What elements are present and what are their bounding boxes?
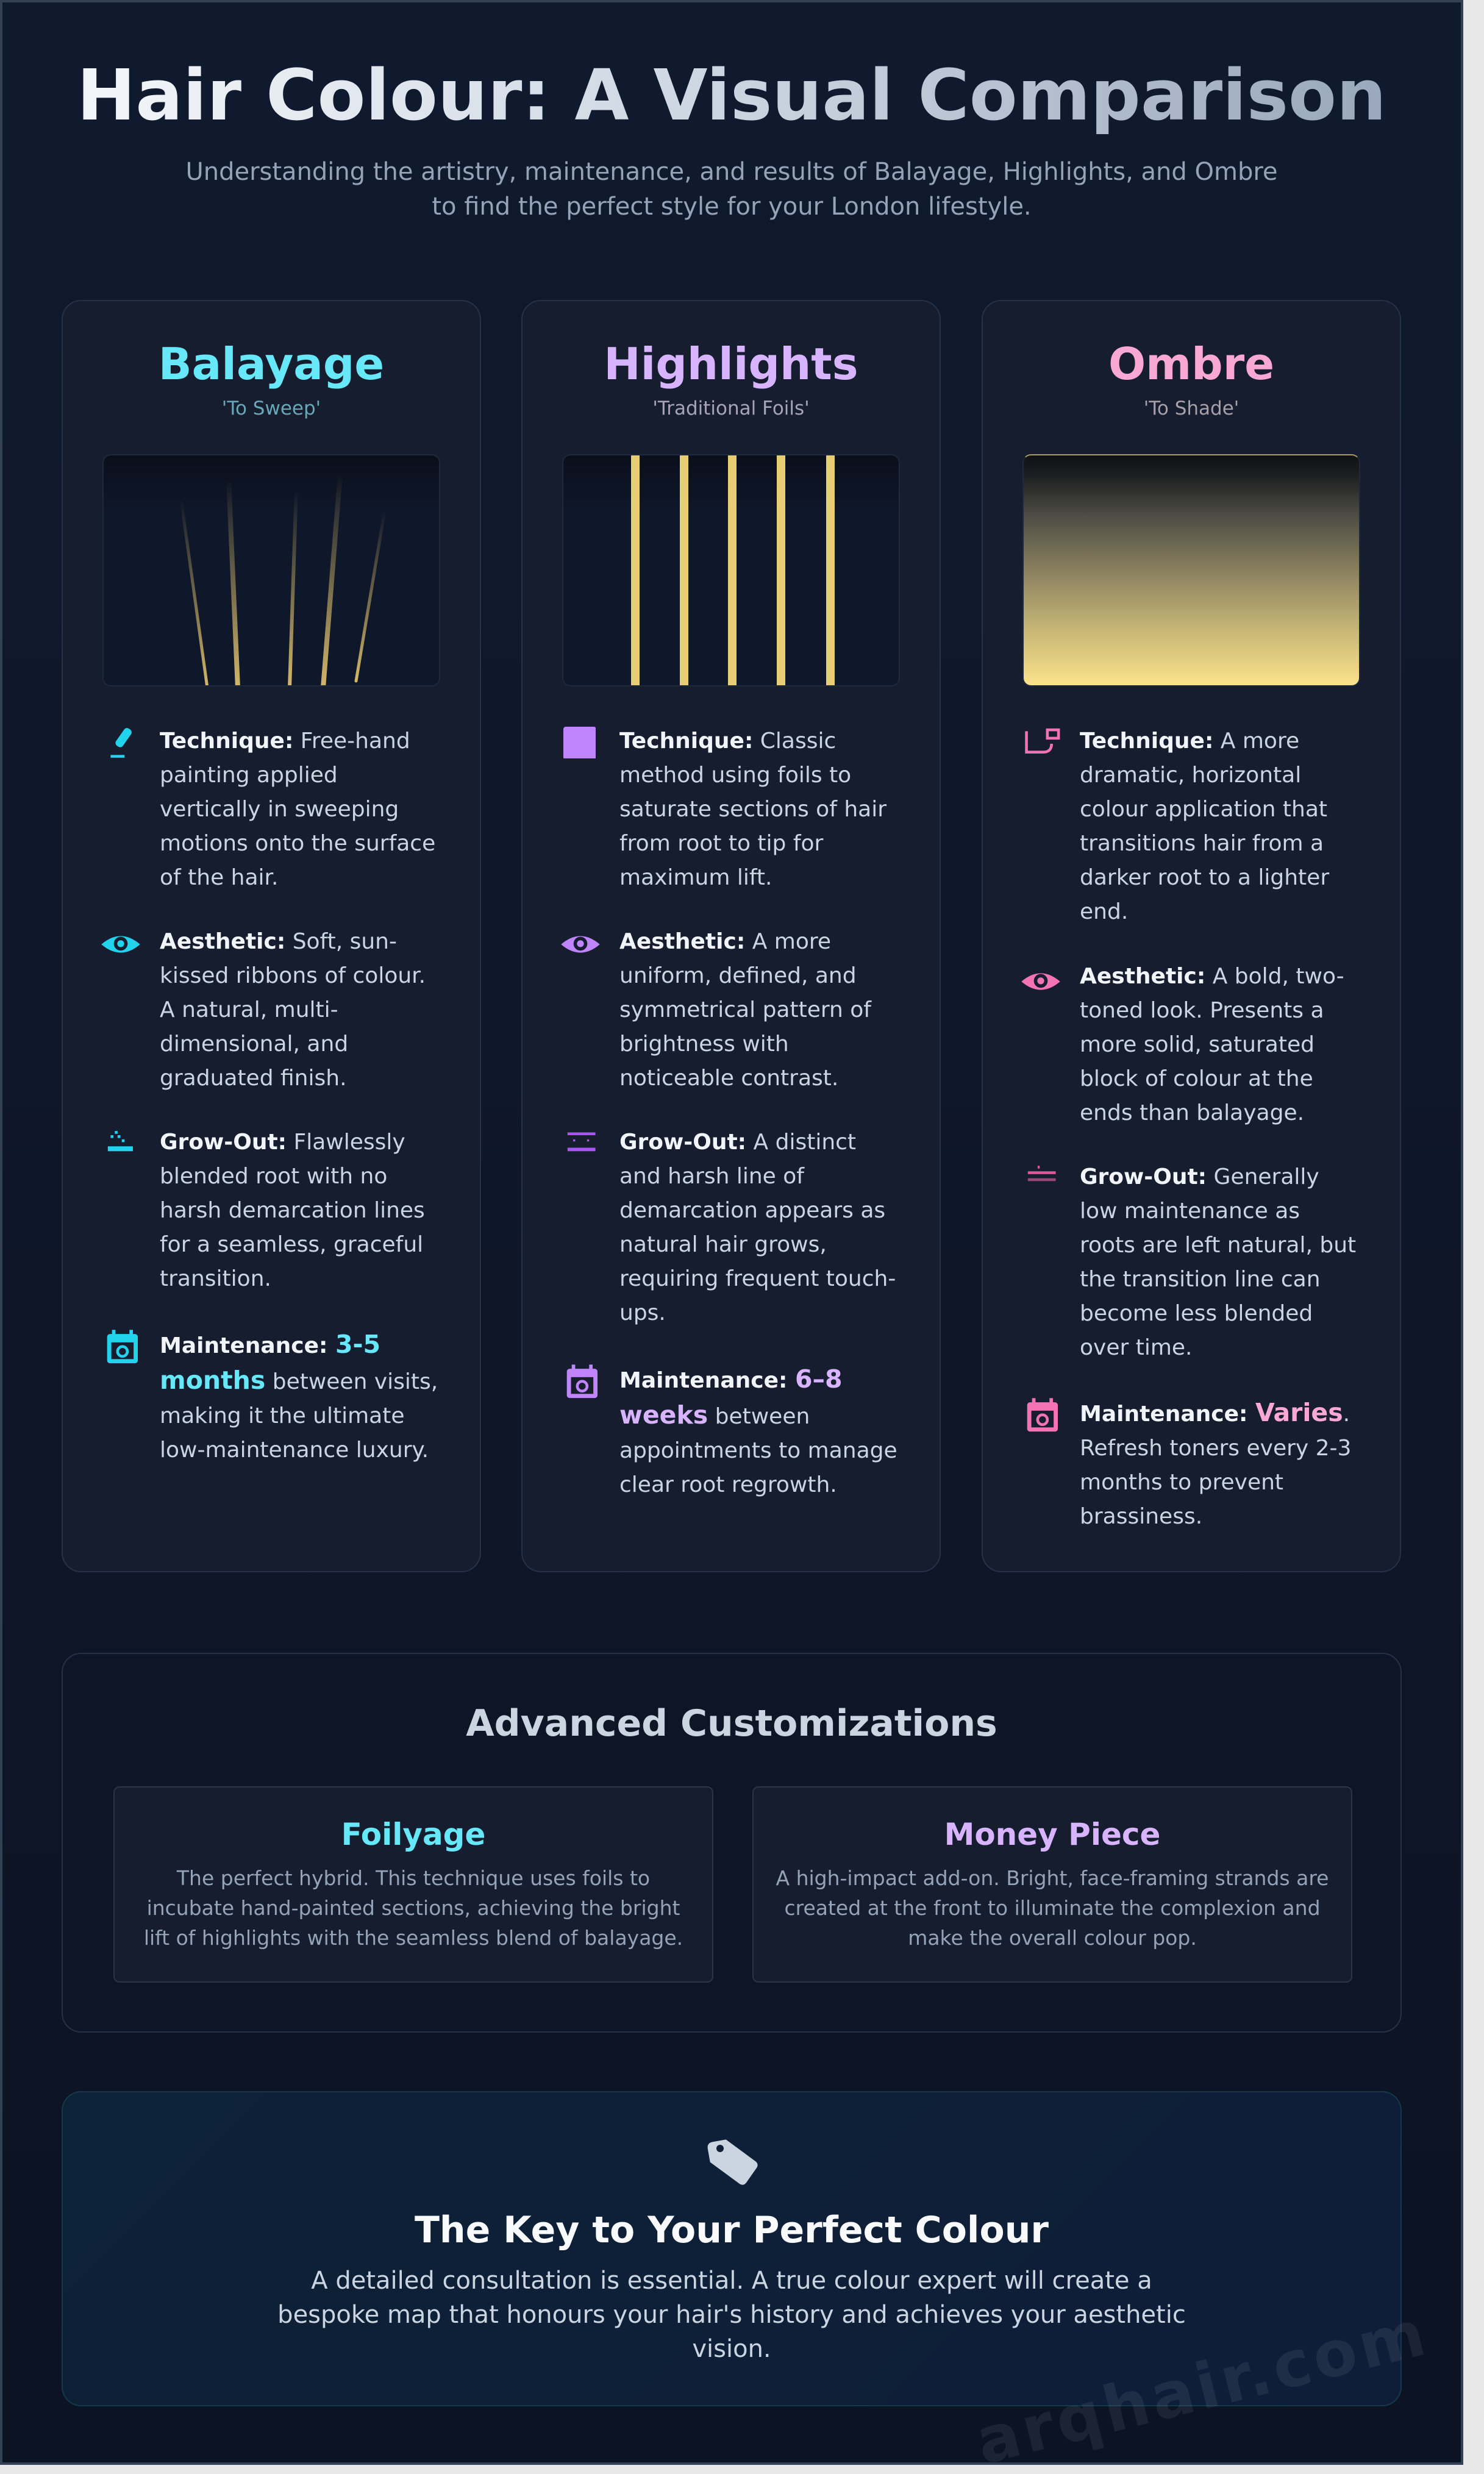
item: maintenance: weeks between <box>619 1400 810 1430</box>
item: maintenance: months to prevent <box>1080 1470 1283 1495</box>
heading: ombre: Ombre <box>1108 338 1274 390</box>
sub-panel: money piece <box>752 1786 1352 1983</box>
item: technique: method using foils to <box>619 763 851 788</box>
item: technique: Technique: Classic <box>619 729 836 754</box>
item: grow-out: roots are left natural, but <box>1080 1233 1356 1258</box>
item: grow-out: for a seamless, graceful <box>160 1232 423 1257</box>
icon: brush <box>110 728 132 758</box>
icon: eye <box>561 936 600 953</box>
subheading: traditional foils: 'Traditional Foils' <box>652 397 810 419</box>
icon: eye <box>101 936 140 953</box>
item: aesthetic: more solid, saturated <box>1080 1032 1315 1057</box>
item: aesthetic: uniform, defined, and <box>619 963 857 988</box>
item: grow-out: natural hair grows, <box>619 1232 827 1257</box>
subtitle <box>185 158 1278 221</box>
item: maintenance: low-maintenance luxury. <box>160 1438 429 1463</box>
panel: advanced customizations <box>62 1653 1402 2033</box>
item: aesthetic <box>101 929 426 1091</box>
sub-panel: money piece: A high-impact add-on. Bright, face-framing strands are <box>776 1866 1329 1890</box>
panel: balayage <box>62 300 481 1572</box>
item: maintenance: Refresh toners every 2-3 <box>1080 1436 1351 1461</box>
item: maintenance: clear root regrowth. <box>619 1472 837 1497</box>
item: technique: transitions hair from a <box>1080 831 1324 856</box>
item: grow-out: the transition line can <box>1080 1267 1321 1292</box>
sub-panel: foilyage: Foilyage <box>341 1817 485 1852</box>
item: aesthetic: toned look. Presents a <box>1080 998 1324 1023</box>
item: technique <box>563 727 886 890</box>
icon: calendar <box>567 1364 598 1399</box>
item: technique: vertically in sweeping <box>160 797 399 822</box>
icon: tag <box>707 2139 758 2185</box>
icon: square <box>563 727 596 758</box>
heading: balayage: Balayage <box>159 338 384 390</box>
item: aesthetic: graduated finish. <box>160 1066 347 1091</box>
text: consultation: A detailed consultation is essential. A true colour expert will create a <box>311 2267 1152 2295</box>
sub-panel: money piece: created at the front to illuminate the complexion and <box>784 1896 1321 1920</box>
item: technique: motions onto the surface <box>160 831 435 856</box>
item: grow-out: requiring frequent touch- <box>619 1266 896 1291</box>
item: grow-out: become less blended <box>1080 1301 1313 1326</box>
illustration: ombre gradient <box>1022 454 1360 686</box>
sub-panel: foilyage <box>113 1786 713 1983</box>
heading: highlights: Highlights <box>604 338 858 390</box>
item: technique <box>1025 728 1329 924</box>
item: maintenance: making it the ultimate <box>160 1403 405 1428</box>
subtitle: to find the perfect style for your London lifestyle. <box>432 193 1032 221</box>
item: aesthetic: ends than balayage. <box>1080 1100 1304 1125</box>
item: aesthetic: block of colour at the <box>1080 1066 1313 1091</box>
icon: harsh line <box>567 1132 596 1151</box>
item: maintenance: appointments to manage <box>619 1438 897 1463</box>
text: consultation: bespoke map that honours your hair's history and achieves your aesthetic <box>277 2301 1186 2329</box>
item: technique: darker root to a lighter <box>1080 865 1329 890</box>
item: maintenance: Maintenance: 6–8 <box>619 1364 843 1394</box>
panel: ombre <box>982 300 1401 1572</box>
illustration: foil stripes <box>562 454 900 686</box>
panel: highlights <box>521 300 941 1572</box>
item: technique: saturate sections of hair <box>619 797 886 822</box>
item: aesthetic: Aesthetic: A more <box>619 929 831 954</box>
item: technique: maximum lift. <box>619 865 772 890</box>
icon: transition line <box>1028 1166 1056 1182</box>
item: aesthetic: symmetrical pattern of <box>619 997 871 1022</box>
item: aesthetic <box>561 929 872 1091</box>
illustration: balayage strands <box>102 454 440 686</box>
item: grow-out: Grow-Out: A distinct <box>619 1130 856 1155</box>
item: grow-out: Grow-Out: Generally <box>1080 1164 1319 1189</box>
item: technique <box>110 728 435 890</box>
item: maintenance <box>107 1330 438 1463</box>
icon: calendar <box>107 1330 138 1363</box>
item: aesthetic: dimensional, and <box>160 1032 348 1057</box>
item: aesthetic: brightness with <box>619 1032 789 1057</box>
item: aesthetic: kissed ribbons of colour. <box>160 963 426 988</box>
item: technique: end. <box>1080 899 1128 924</box>
panel: key to perfect colour <box>62 2091 1402 2406</box>
icon: eye <box>1021 973 1060 990</box>
item: aesthetic <box>1021 964 1344 1125</box>
item: grow-out: over time. <box>1080 1335 1193 1360</box>
item: grow-out: low maintenance as <box>1080 1199 1300 1224</box>
text: consultation <box>277 2267 1186 2363</box>
sub-panel: foilyage: lift of highlights with the seamless blend of balayage. <box>144 1926 683 1950</box>
icon: colour application <box>1025 728 1060 754</box>
heading: the key: The Key to Your Perfect Colour <box>415 2209 1049 2251</box>
icon: blend line <box>107 1131 133 1151</box>
item: technique: Technique: A more <box>1080 729 1299 754</box>
sub-panel: foilyage: incubate hand-painted sections, achieving the bright <box>147 1896 680 1920</box>
item: technique: painting applied <box>160 763 338 788</box>
item: grow-out: transition. <box>160 1266 271 1291</box>
icon: calendar <box>1027 1398 1058 1431</box>
sub-panel: money piece: Money Piece <box>944 1817 1160 1852</box>
item: maintenance: Maintenance: Varies. <box>1080 1398 1350 1427</box>
heading: advanced customizations: Advanced Customizations <box>466 1702 997 1745</box>
item: grow-out: blended root with no <box>160 1164 387 1189</box>
item: grow-out: harsh demarcation lines <box>160 1198 425 1223</box>
item: technique: Technique: Free-hand <box>160 729 410 754</box>
item: grow-out: demarcation appears as <box>619 1198 885 1223</box>
item: maintenance: brassiness. <box>1080 1504 1202 1529</box>
item: grow-out: ups. <box>619 1300 666 1325</box>
item: maintenance <box>567 1364 897 1497</box>
item: aesthetic: A natural, multi- <box>160 997 338 1022</box>
sub-panel: money piece: make the overall colour pop. <box>908 1926 1197 1950</box>
item: grow-out: and harsh line of <box>619 1164 804 1189</box>
subtitle: Understanding the artistry, maintenance, and results of Balayage, Highlights, and Ombre <box>185 158 1278 186</box>
item: technique: colour application that <box>1080 797 1327 822</box>
item: grow-out <box>1028 1164 1356 1360</box>
title: Hair Colour: A Visual Comparison <box>77 55 1386 137</box>
item: grow-out: Grow-Out: Flawlessly <box>160 1130 405 1155</box>
item: aesthetic: noticeable contrast. <box>619 1066 838 1091</box>
item: grow-out <box>107 1130 425 1291</box>
item: maintenance <box>1027 1398 1351 1529</box>
subheading: to shade: 'To Shade' <box>1144 397 1239 419</box>
item: aesthetic: Aesthetic: Soft, sun- <box>160 929 397 954</box>
item: technique: dramatic, horizontal <box>1080 763 1301 788</box>
text: consultation: vision. <box>692 2335 771 2363</box>
item: maintenance: months between visits, <box>160 1366 438 1395</box>
item: technique: of the hair. <box>160 865 278 890</box>
item: technique: from root to tip for <box>619 831 823 856</box>
sub-panel: foilyage: The perfect hybrid. This technique uses foils to <box>177 1866 650 1890</box>
subheading: to sweep: 'To Sweep' <box>222 397 321 419</box>
item: grow-out <box>567 1130 896 1325</box>
item: maintenance: Maintenance: 3-5 <box>160 1330 380 1359</box>
item: aesthetic: Aesthetic: A bold, two- <box>1080 964 1344 989</box>
